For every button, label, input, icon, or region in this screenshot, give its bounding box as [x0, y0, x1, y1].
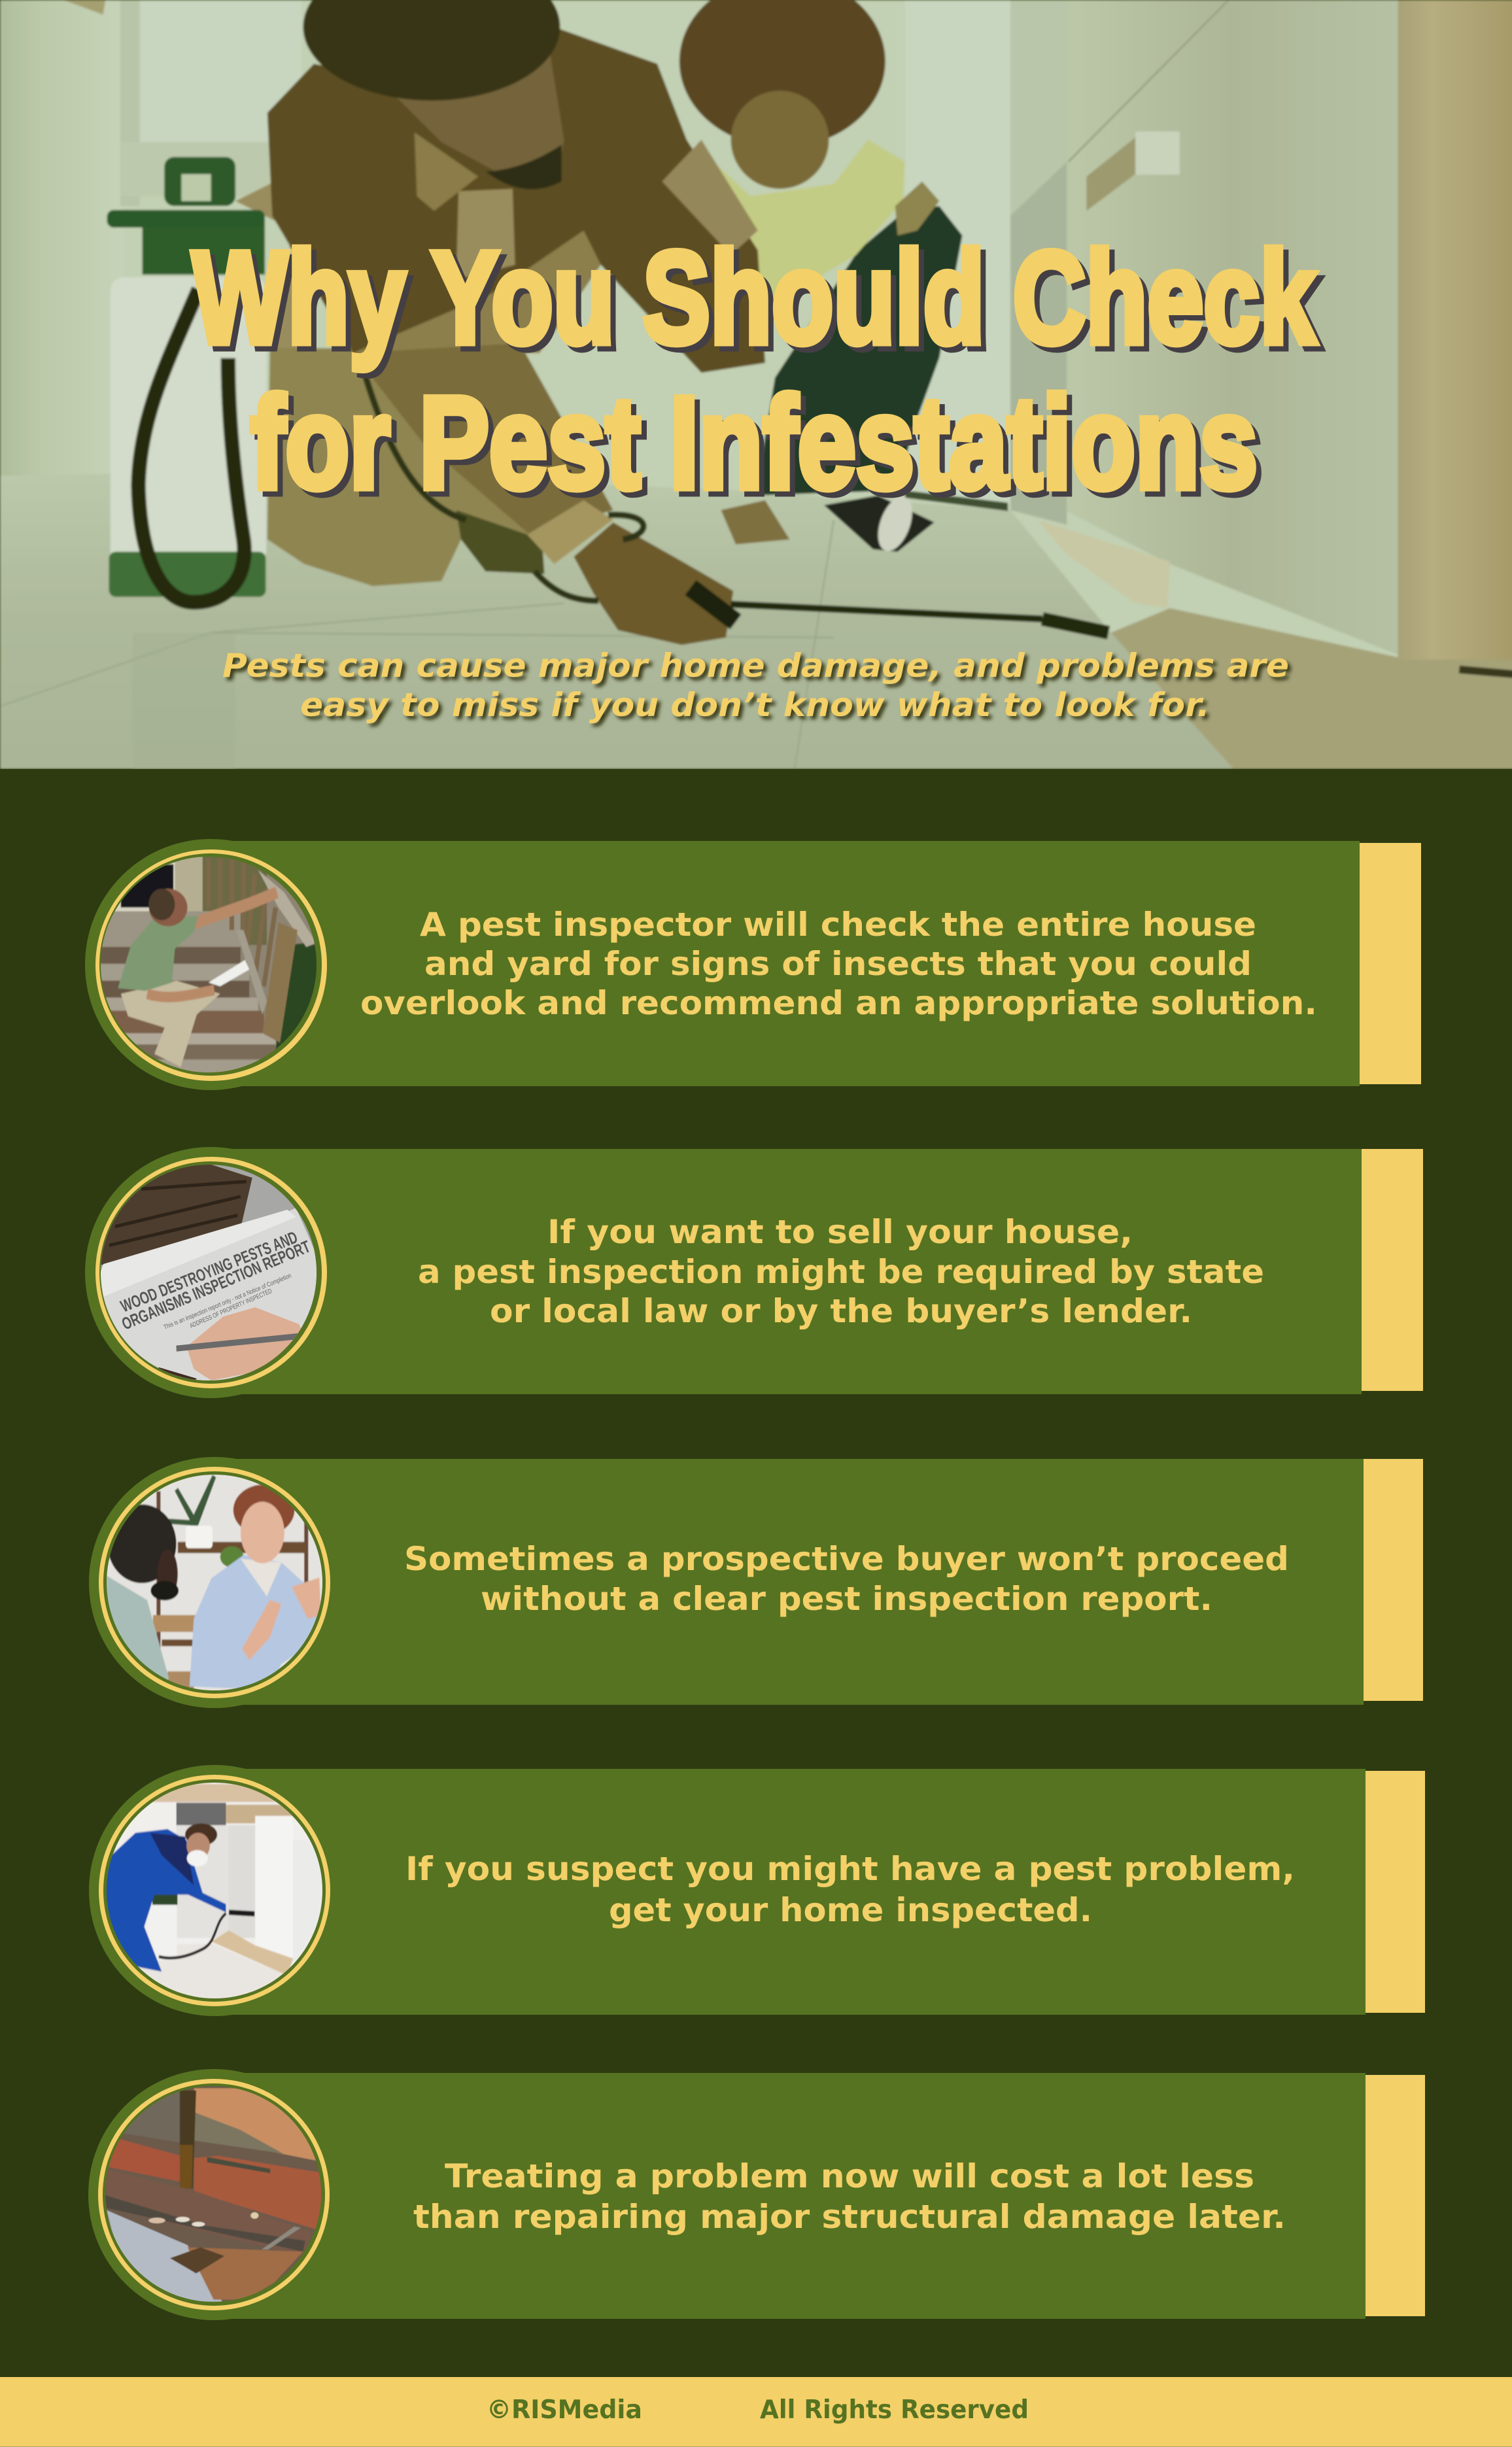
pen [177, 1336, 299, 1348]
paper form [97, 1208, 322, 1388]
text [418, 1213, 1264, 1330]
circle frame [89, 1457, 340, 1708]
circle frame [88, 2069, 339, 2320]
panel: suspect a pest problem [89, 1765, 1425, 2016]
yellow tab [1366, 2075, 1425, 2316]
floor tile joints [2, 521, 834, 723]
woman: hand on knee [895, 182, 939, 235]
text: and yard for signs of insects that you could [424, 945, 1252, 983]
woman: hair [679, 0, 885, 147]
floor [0, 471, 1233, 769]
sprayer tank [148, 1904, 177, 1960]
green leaves [220, 1547, 243, 1567]
toe kick [1037, 520, 1170, 608]
text [413, 2157, 1286, 2236]
text: or local law or by the buyer’s lender. [490, 1292, 1192, 1330]
yellow tab [1360, 843, 1421, 1084]
text: overlook and recommend an appropriate solution. [360, 984, 1317, 1022]
man: mask [187, 1850, 208, 1866]
title [192, 225, 1316, 516]
woman: hand on floor [721, 500, 790, 544]
text: than repairing major structural damage later. [413, 2198, 1286, 2236]
text: get your home inspected. [609, 1891, 1092, 1929]
man: trousers [267, 348, 544, 586]
post [262, 923, 298, 1042]
photo: inspection report form: WOOD DESTROYING PESTS AND [118, 1227, 300, 1316]
text [405, 1850, 1295, 1929]
far right door [1398, 0, 1512, 660]
reflection of sprayer [133, 768, 235, 769]
photo: inspection report form: This is an inspection report only - not a Notice of Completion [163, 1273, 292, 1331]
photo: technician spraying a cabinet [95, 1777, 328, 2002]
man: dark shoulder [150, 1833, 194, 1885]
subtitle [222, 647, 1289, 724]
wand [229, 1912, 254, 1914]
title: for Pest Infestations [250, 370, 1258, 516]
floor [141, 1943, 287, 2002]
woman: hair [233, 1484, 294, 1535]
man: shirt [118, 915, 198, 991]
man: arm [191, 893, 277, 925]
circle frame [85, 1147, 336, 1398]
flashlight [824, 492, 935, 556]
man: head [149, 889, 188, 926]
man: shirt [267, 27, 765, 373]
yellow tab [1362, 1149, 1423, 1391]
photo: inspection report form [95, 1155, 328, 1388]
text: a pest inspection might be required by state [418, 1253, 1264, 1291]
green bar [222, 841, 1360, 1086]
man: hip behind [235, 182, 314, 353]
hose [159, 1913, 226, 1958]
text [360, 906, 1317, 1022]
man: collar [415, 132, 478, 211]
yellow tab [1366, 1771, 1425, 2013]
text: If you want to sell your house, [547, 1213, 1133, 1251]
spray wand [731, 604, 1042, 619]
man: beard [485, 145, 562, 190]
man: face [186, 1833, 210, 1859]
footer: ©RISMedia [487, 2395, 642, 2425]
photo: two people talking [95, 1465, 328, 1698]
cabinet handle [1086, 131, 1180, 211]
green bar [222, 1149, 1362, 1394]
man: hand [574, 522, 733, 645]
sprayer [107, 157, 266, 602]
woman: shirt [190, 1555, 322, 1690]
circle frame [85, 839, 336, 1090]
weathered wood [97, 1163, 252, 1266]
man: blue overalls [103, 1829, 226, 1972]
green bar [229, 1769, 1366, 2015]
balusters [209, 859, 275, 986]
woman: sweater [717, 140, 906, 299]
photo: inspection report form: ORGANISMS INSPECTION REPORT [119, 1237, 313, 1334]
man: hair [303, 0, 560, 101]
cabinet diagonal edge [1069, 0, 1229, 162]
text: If you suspect you might have a pest problem, [405, 1850, 1295, 1888]
man: tan chest panel [456, 189, 515, 280]
plinth [211, 1930, 293, 1976]
man: hair [185, 1823, 217, 1846]
green bar [229, 2073, 1366, 2319]
hose [363, 368, 644, 601]
panel: inspector checks house [85, 839, 1421, 1090]
wall and window, left [0, 0, 301, 476]
photo: inspection report form: ADDRESS OF PROPERTY INSPECTED [189, 1288, 273, 1330]
plant [167, 1476, 215, 1523]
man: shoulder patch [662, 140, 758, 255]
man: forearm [147, 990, 215, 997]
footer: All Rights Reserved [760, 2395, 1029, 2425]
text: without a clear pest inspection report. [481, 1580, 1212, 1618]
photo: termite-damaged wood [98, 2081, 329, 2304]
man: trousers [121, 981, 220, 1067]
footer [0, 2377, 1512, 2447]
subtitle: easy to miss if you don’t know what to look for. [300, 686, 1210, 724]
panel: treat problem now [88, 2069, 1425, 2320]
spray wand handle [691, 587, 736, 622]
text: Sometimes a prospective buyer won’t proceed [404, 1540, 1289, 1578]
text [404, 1540, 1289, 1618]
man: face [392, 49, 564, 182]
green bar [229, 1459, 1364, 1705]
yellow tab [1364, 1459, 1423, 1701]
subtitle: Pests can cause major home damage, and problems are [222, 647, 1289, 685]
dark under form [153, 1367, 197, 1388]
circle frame [89, 1765, 340, 2016]
cabinet, right [1065, 0, 1398, 655]
dark strip under cabinet column [905, 490, 1008, 511]
man: chest lower [353, 230, 601, 353]
man: cuff [527, 500, 613, 564]
man: shirt [103, 1574, 169, 1690]
wand nozzle [1042, 619, 1108, 633]
woman: face [241, 1501, 284, 1564]
railing [258, 870, 317, 947]
woman: face [731, 91, 829, 189]
clipboard [209, 960, 249, 986]
woman: hands [242, 1600, 281, 1660]
broken rail [236, 930, 267, 1014]
floor strip at far right [1111, 608, 1512, 769]
woman: trousers [755, 206, 963, 496]
hand [186, 1307, 308, 1380]
man: shadow under body [456, 510, 544, 574]
panel: clear report for buyers [89, 1457, 1423, 1708]
panel: selling your house [85, 1147, 1423, 1398]
man: head [107, 1504, 177, 1583]
text: A pest inspector will check the entire house [420, 906, 1256, 944]
pot [186, 1526, 213, 1549]
man: near arm sleeve [353, 343, 613, 535]
text: Treating a problem now will cost a lot less [445, 2157, 1254, 2195]
photo: inspector on porch steps [95, 851, 328, 1082]
hero photo: pest inspector and homeowner [0, 0, 1512, 770]
